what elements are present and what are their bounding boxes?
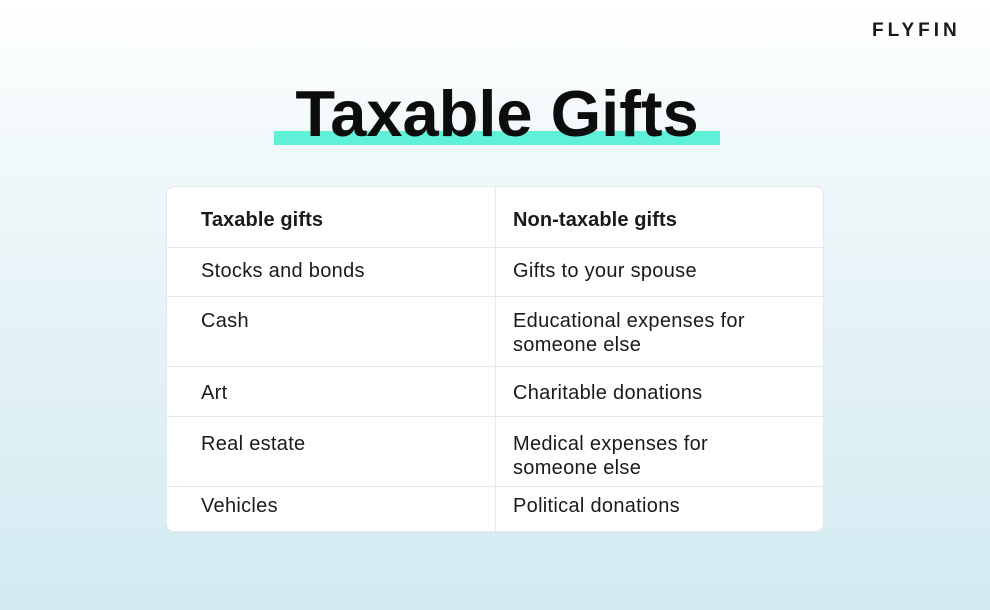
text: someone else <box>513 334 641 356</box>
text: Gifts to your spouse <box>513 260 697 282</box>
title <box>274 77 720 150</box>
text: Medical expenses for <box>513 433 708 455</box>
table panel <box>166 186 824 532</box>
row 2: Cash <box>201 310 249 332</box>
text: Charitable donations <box>513 382 702 404</box>
header: taxable: Taxable gifts <box>201 209 323 231</box>
text: someone else <box>513 457 641 479</box>
title text: Taxable Gifts <box>295 77 699 150</box>
row 3: Art <box>201 382 227 404</box>
text: Educational expenses for <box>513 310 745 332</box>
text: Political donations <box>513 495 680 517</box>
row 1: Stocks and bonds <box>201 260 365 282</box>
logo: FLYFIN <box>872 20 961 41</box>
title highlight <box>274 131 720 145</box>
row 5: Vehicles <box>201 495 278 517</box>
row 4: Real estate <box>201 433 305 455</box>
header: non-taxable: Non-taxable gifts <box>513 209 677 231</box>
